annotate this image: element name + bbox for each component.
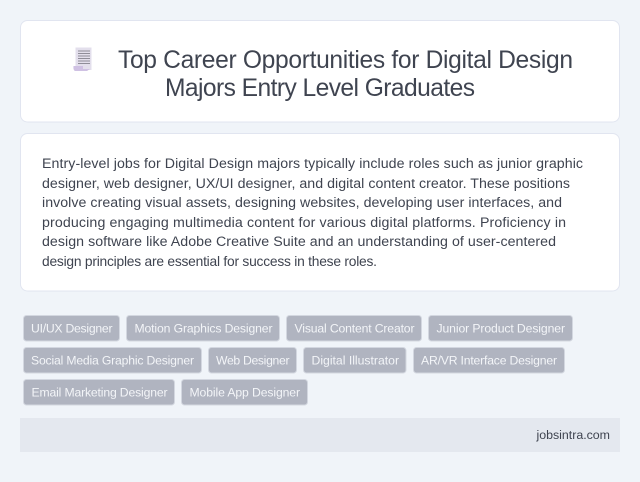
tag: Web Designer: Web Designer bbox=[216, 354, 290, 368]
footer bbox=[20, 418, 620, 452]
title: Majors Entry Level Graduates bbox=[165, 75, 475, 102]
tag: Visual Content Creator: Visual Content Creator bbox=[294, 322, 414, 336]
tag: Motion Graphics Designer bbox=[126, 316, 280, 341]
panel: header bbox=[20, 20, 620, 122]
tag: AR/VR Interface Designer bbox=[414, 348, 564, 373]
footer source text: jobsintra.com bbox=[536, 428, 610, 442]
tag: Social Media Graphic Designer bbox=[24, 348, 202, 373]
description text: designer, web designer, UX/UI designer, and digital content creator. These positions bbox=[42, 176, 570, 192]
tag: Motion Graphics Designer: Motion Graphics Designer bbox=[134, 322, 272, 336]
panel: description bbox=[20, 134, 620, 291]
tag: Junior Product Designer bbox=[428, 316, 572, 341]
description text: producing engaging multimedia content for various digital platforms. Proficiency in bbox=[42, 215, 566, 231]
tag: Web Designer bbox=[208, 348, 296, 373]
tag: Digital Illustrator: Digital Illustrator bbox=[312, 354, 399, 368]
icon: document scroll bbox=[73, 48, 92, 71]
tag: UI/UX Designer bbox=[24, 316, 120, 341]
description text bbox=[42, 156, 583, 269]
tag: UI/UX Designer: UI/UX Designer bbox=[31, 322, 112, 336]
tag: AR/VR Interface Designer: AR/VR Interface Designer bbox=[421, 354, 557, 368]
tag: Junior Product Designer: Junior Product Designer bbox=[436, 322, 565, 336]
description text: Entry-level jobs for Digital Design majors typically include roles such as junior graphic bbox=[42, 156, 583, 172]
tag list bbox=[24, 316, 572, 405]
tag: Email Marketing Designer bbox=[24, 380, 174, 405]
tag: Digital Illustrator bbox=[304, 348, 406, 373]
title bbox=[118, 47, 573, 102]
tag: Mobile App Designer bbox=[182, 380, 308, 405]
tag: Visual Content Creator bbox=[286, 316, 422, 341]
tag: Mobile App Designer: Mobile App Designer bbox=[190, 386, 300, 400]
tag: Social Media Graphic Designer: Social Media Graphic Designer bbox=[31, 354, 194, 368]
tag: Email Marketing Designer: Email Marketing Designer bbox=[32, 386, 168, 400]
description text: design software like Adobe Creative Suite and an understanding of user-centered bbox=[42, 234, 556, 250]
description text: design principles are essential for success in these roles. bbox=[42, 254, 377, 269]
title: Top Career Opportunities for Digital Design bbox=[118, 47, 573, 74]
description text: involve creating visual assets, designing websites, developing user interfaces, and bbox=[42, 195, 562, 211]
